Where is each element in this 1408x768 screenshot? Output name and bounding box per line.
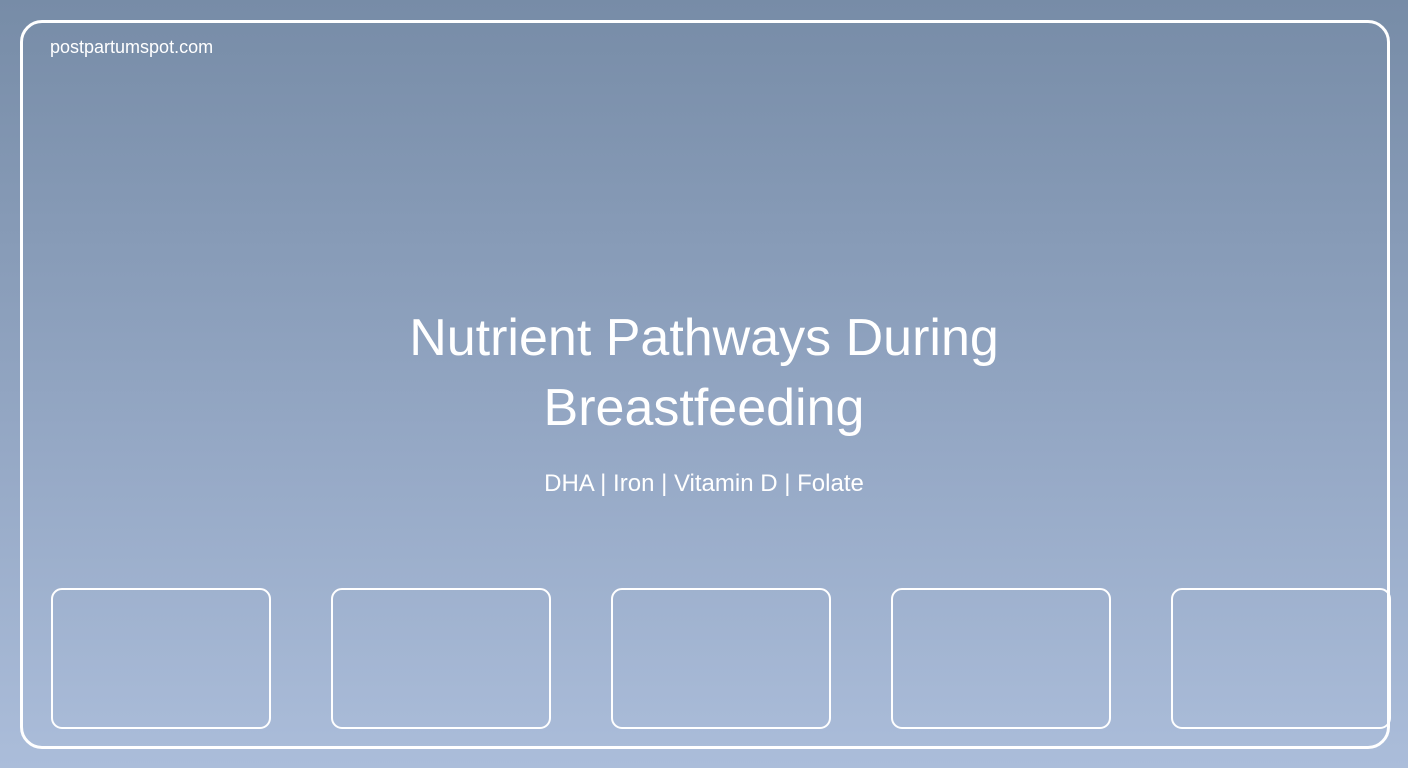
card 5 <box>1171 588 1391 729</box>
title: Breastfeeding <box>544 379 864 437</box>
card 1 <box>51 588 271 729</box>
site name: postpartumspot.com <box>50 37 213 57</box>
subtitle: DHA | Iron | Vitamin D | Folate <box>544 470 864 497</box>
title: Nutrient Pathways During <box>409 309 999 367</box>
title <box>409 309 999 437</box>
card 4 <box>891 588 1111 729</box>
card 2 <box>331 588 551 729</box>
card 3 <box>611 588 831 729</box>
